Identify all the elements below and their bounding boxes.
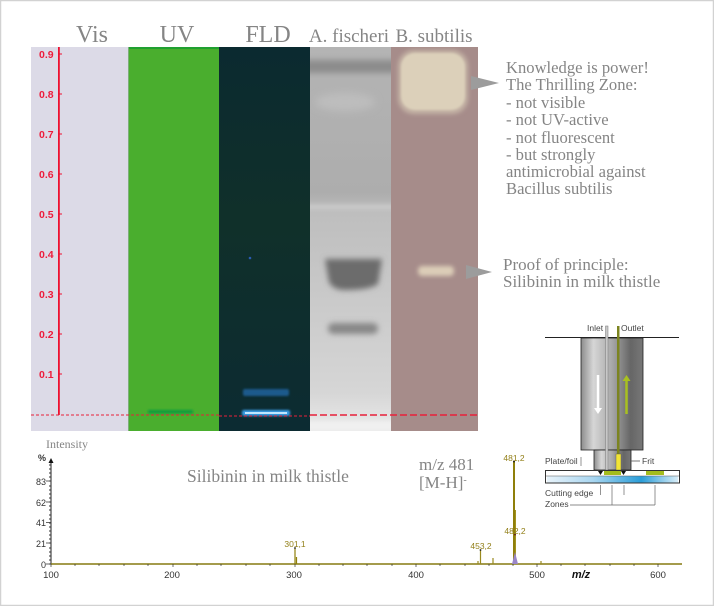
Rf scale: 0.5 [39,209,54,221]
lane headings: B. subtilis [395,26,473,47]
mass spectrum chart [36,453,682,581]
x axis: 100 [43,570,59,581]
text: thrilling zone: - not visible [506,93,585,112]
x axis: m/z [572,569,591,581]
text: thrilling zone: Knowledge is power! [506,58,649,77]
text: thrilling zone: antimicrobial against [506,162,646,181]
panel: A. fischeri lane [310,47,391,431]
text: thrilling zone: - not UV-active [506,110,609,129]
lane headings: Vis [76,22,108,48]
interface diagram: Outlet [621,323,644,333]
y axis: 41 [36,518,46,528]
text: thrilling zone: The Thrilling Zone: [506,75,638,94]
text: thrilling zone: - but strongly [506,145,596,164]
label: m/z 481: m/z 481 [419,455,474,474]
Rf scale: 0.1 [39,369,54,381]
lane headings: UV [160,22,195,48]
label: m/z 481: [M-H] [419,473,467,492]
peaks: 301,1 [284,539,306,549]
y axis: 0 [41,560,46,570]
text: thrilling zone: Bacillus subtilis [506,179,612,198]
Rf scale: 0.9 [39,49,54,61]
x axis [43,564,682,581]
interface diagram: Plate/foil [545,456,578,466]
lane headings: FLD [245,22,291,48]
lane headings [76,22,473,48]
text: thrilling zone: - not fluorescent [506,128,615,147]
interface diagram: Zones [545,499,569,509]
peaks: 482,2 [504,526,526,536]
panel: B. subtilis lane [391,47,478,431]
y axis: 62 [36,498,46,508]
Rf scale [39,47,62,415]
interface diagram: Cutting edge [545,488,593,498]
y axis [36,453,54,570]
peaks [284,453,541,564]
Rf scale: 0.4 [39,249,54,261]
label: silibinin in milk thistle: Silibinin in milk thistle [187,466,349,486]
panel: FLD lane [219,47,310,431]
Rf scale: 0.2 [39,329,54,341]
x axis: 400 [408,570,424,581]
interface diagram [545,323,680,509]
Rf scale: 0.3 [39,289,54,301]
x axis: 300 [286,570,302,581]
label: m/z 481: - [463,475,467,486]
x axis: 600 [650,570,666,581]
y axis: 83 [36,477,46,487]
Rf scale: 0.8 [39,89,54,101]
x axis: 500 [529,570,545,581]
Rf scale: 0.6 [39,169,54,181]
peaks: 453,2 [470,541,492,551]
text: proof of principle: Proof of principle: [503,255,629,274]
panel: Vis lane [31,47,129,431]
text: proof of principle: Silibinin in milk thistle [503,272,660,291]
interface diagram: Inlet [587,323,604,333]
lane headings: A. fischeri [309,26,389,47]
interface diagram: Frit [642,456,655,466]
peaks: 481,2 [503,453,525,463]
y axis: % [38,453,46,463]
label: intensity: Intensity [46,437,88,451]
arrow: proof of principle [466,265,492,279]
y axis: 21 [36,539,46,549]
Rf scale: 0.7 [39,129,54,141]
baseline [31,415,478,416]
arrow: thrilling zone [471,76,499,90]
panel: UV lane [128,47,219,431]
x axis: 200 [164,570,180,581]
